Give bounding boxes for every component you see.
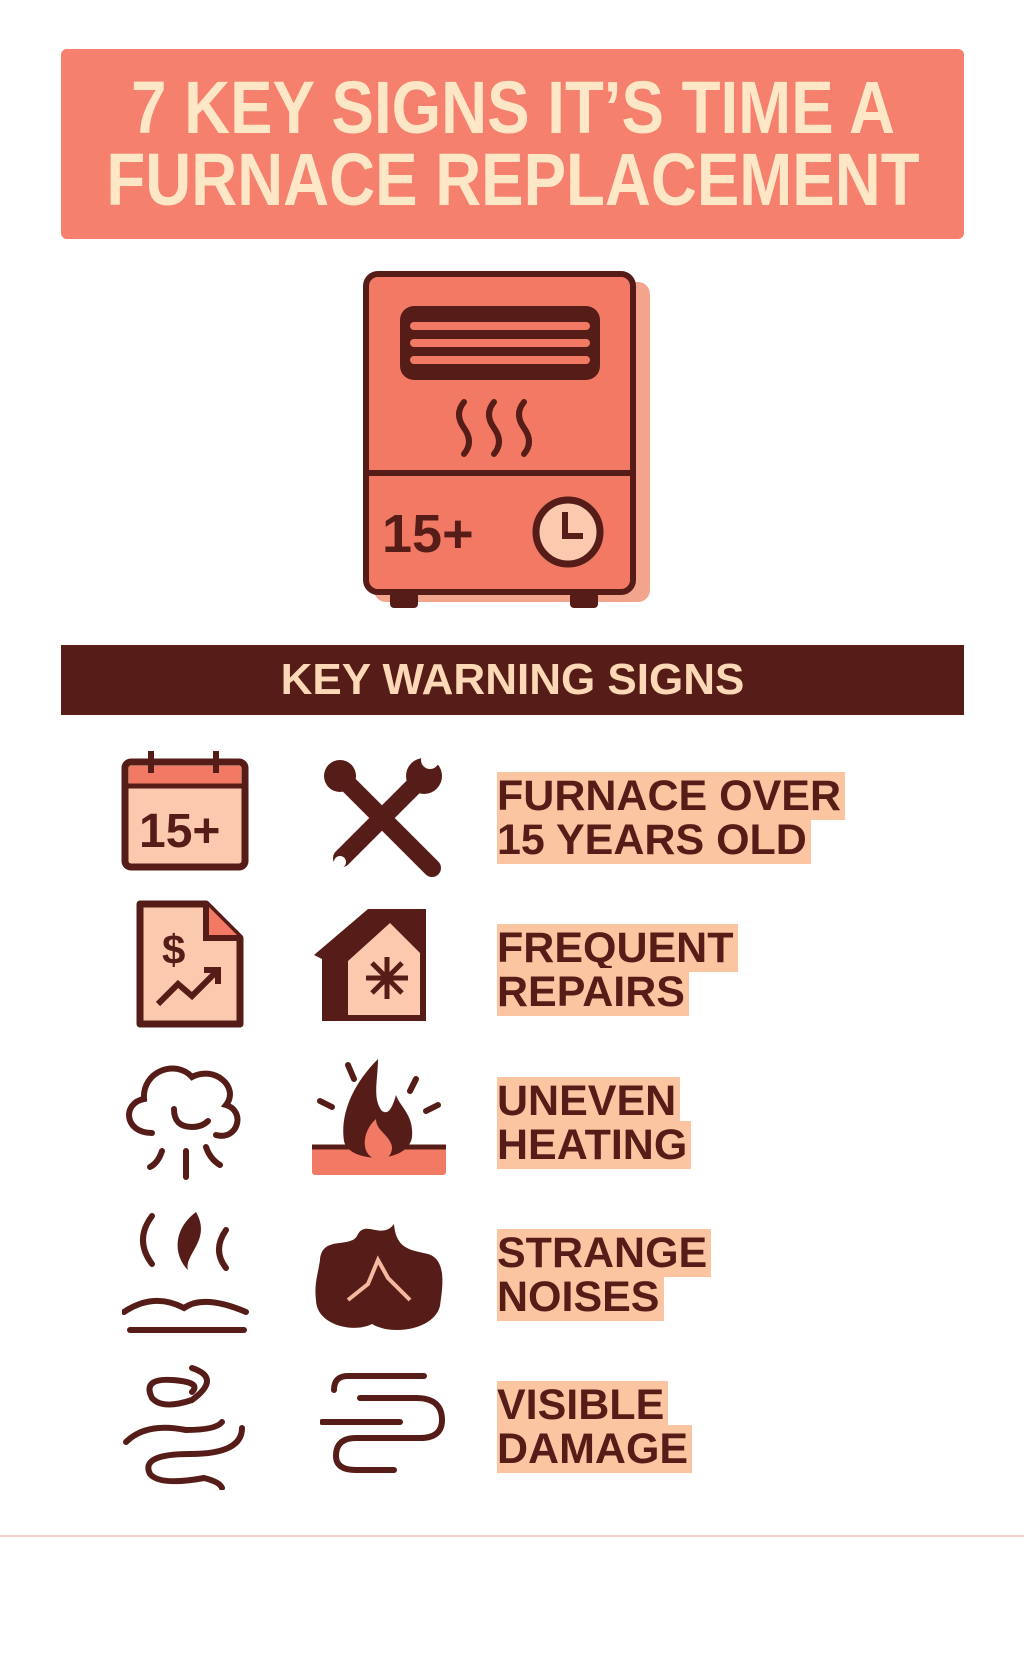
- text: frequent repairs: REPAIRS: [497, 968, 685, 1016]
- text: furnace over 15 years: 15 YEARS OLD: [497, 816, 807, 864]
- text: uneven heating: UNEVEN: [497, 1077, 676, 1125]
- icon: smoke: [122, 1212, 249, 1333]
- text: visible damage: DAMAGE: [497, 1425, 688, 1473]
- banner: [61, 645, 964, 715]
- text: visible damage: [497, 1381, 692, 1473]
- icon: bill: [136, 900, 244, 1028]
- icon: bill: $: [162, 926, 185, 973]
- text: visible damage: VISIBLE: [497, 1381, 664, 1429]
- title: FURNACE REPLACEMENT: [106, 138, 920, 221]
- text: strange noises: STRANGE: [497, 1229, 707, 1277]
- icon: calendar: [122, 751, 248, 870]
- icon: rocks: [315, 1224, 442, 1330]
- icon: fire: [312, 1059, 446, 1175]
- icon: calendar: 15+: [139, 805, 220, 858]
- icon: wind swirl: [123, 1365, 245, 1490]
- text: frequent repairs: FREQUENT: [497, 924, 734, 972]
- text: uneven heating: [497, 1077, 691, 1169]
- text: strange noises: [497, 1229, 711, 1321]
- text: frequent repairs: [497, 924, 738, 1016]
- icon: furnace: 15+: [382, 504, 474, 564]
- title: 7 KEY SIGNS IT’S TIME A: [131, 66, 895, 149]
- text: furnace over 15 years: [497, 772, 845, 864]
- icon: tools: [324, 758, 442, 877]
- text: furnace over 15 years: FURNACE OVER: [497, 772, 841, 820]
- icon: wind lines: [320, 1373, 445, 1473]
- text: strange noises: NOISES: [497, 1273, 660, 1321]
- banner: KEY WARNING SIGNS: [281, 655, 744, 704]
- icon: house: [314, 909, 426, 1021]
- icon: furnace: [363, 271, 650, 608]
- text: uneven heating: HEATING: [497, 1121, 687, 1169]
- icon: cloud: [126, 1066, 240, 1180]
- title: [61, 49, 964, 239]
